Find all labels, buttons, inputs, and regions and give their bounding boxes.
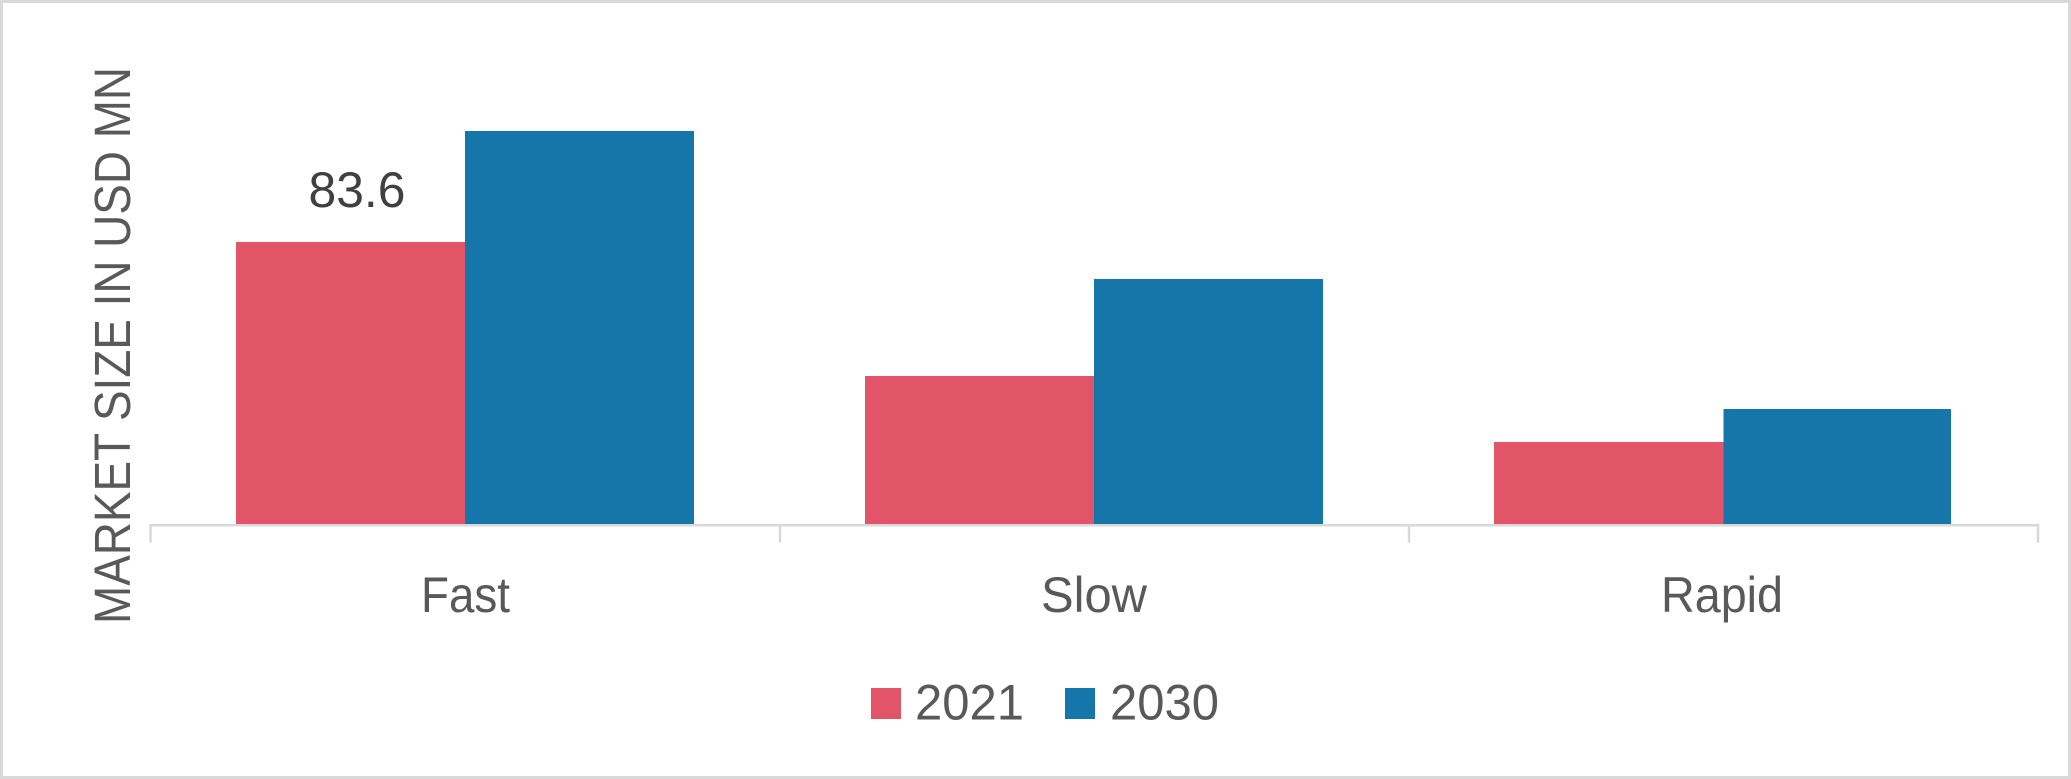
bars: Fast — [236, 131, 694, 524]
legend: 2030 — [1110, 674, 1219, 730]
category labels: Fast — [421, 567, 510, 623]
legend — [871, 674, 1219, 730]
category labels: Slow — [1041, 567, 1148, 623]
legend: 2021 — [915, 674, 1024, 730]
bars: Slow — [865, 279, 1323, 524]
bars: Rapid — [1494, 409, 1951, 524]
category labels: Rapid — [1661, 567, 1783, 623]
data label: 83.6 — [308, 162, 406, 218]
category labels — [421, 567, 1783, 623]
x axis — [150, 524, 2039, 542]
y axis title: MARKET SIZE IN USD MN — [84, 67, 141, 624]
